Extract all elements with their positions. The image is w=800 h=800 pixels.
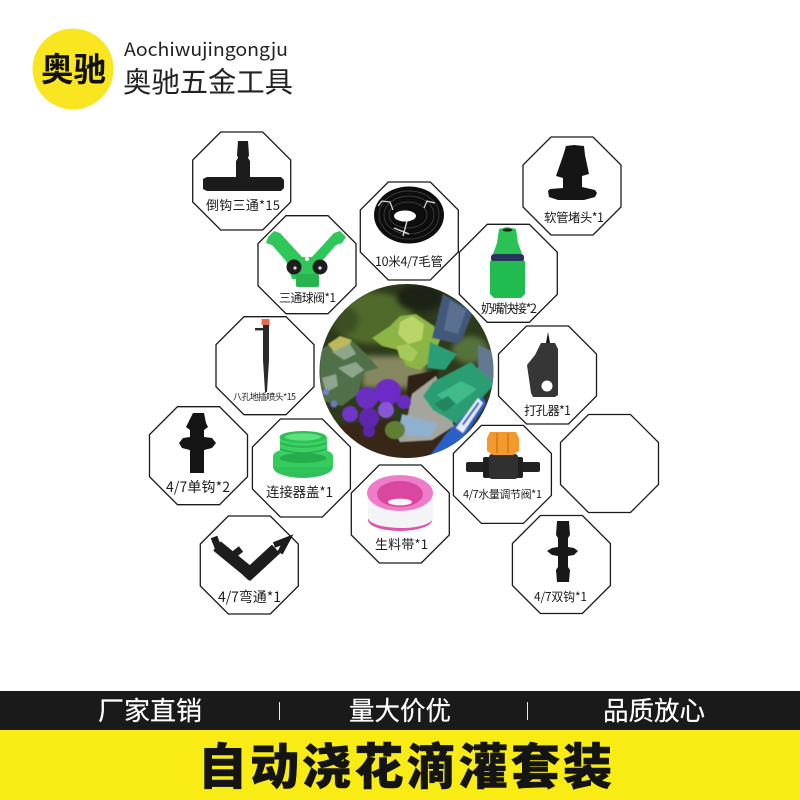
black selling-points bar (0, 691, 800, 730)
item: hole punch tool (498, 326, 596, 424)
item: connector cap (252, 419, 350, 517)
sleeve (432, 294, 473, 344)
item: tee barb connector (193, 132, 291, 230)
item: connector cap: 连接器盖*1 (266, 481, 333, 501)
empty octagon frame (560, 414, 658, 512)
yellow title bar: 自动浇花滴灌套装 (198, 728, 612, 799)
item: hole punch tool: 打孔器*1 (524, 400, 571, 419)
item: flow control valve: 4/7水量调节阀*1 (463, 486, 542, 502)
yellow title bar (0, 728, 800, 800)
black selling-points bar: 厂家直销 (98, 691, 202, 728)
blue tool (430, 396, 486, 458)
brand name (123, 36, 293, 101)
item: single barb connector: 4/7单钩*2 (166, 477, 230, 497)
item: PTFE tape roll: 生料带*1 (375, 534, 428, 553)
pot (394, 376, 454, 442)
item: hose end plug: 软管堵头*1 (544, 207, 604, 226)
item: Y ball valve (258, 216, 356, 314)
brand name: Aochiwujingongju (124, 36, 288, 62)
item: 10 m capillary tube coil (360, 182, 458, 280)
black selling-points bar: 量大价优 (349, 691, 451, 728)
soil (339, 418, 449, 458)
item: elbow connector (200, 516, 298, 614)
purple flowers (356, 387, 378, 409)
item: quick connector: 奶嘴快接*2 (481, 298, 537, 317)
brand name: 奥驰五金工具 (123, 60, 293, 101)
item: Y ball valve: 三通球阀*1 (279, 289, 336, 306)
lime plant (372, 314, 440, 370)
left foliage (320, 338, 378, 406)
item: ground spike sprinkler: 八孔地插喷头*15 (233, 390, 296, 403)
item: tee barb connector: 倒钩三通*15 (206, 195, 280, 214)
item: ground spike sprinkler (216, 317, 314, 415)
item: single barb connector (150, 407, 248, 505)
item: elbow connector: 4/7弯通*1 (218, 587, 281, 607)
item: hose end plug (523, 137, 621, 235)
logo: yellow circle badge: 奥驰 (41, 43, 106, 91)
black selling-points bar: 品质放心 (603, 691, 705, 728)
logo: yellow circle badge (32, 28, 114, 110)
item: double barb connector (512, 516, 610, 614)
item: double barb connector: 4/7双钩*1 (534, 588, 587, 605)
item: PTFE tape roll (351, 465, 449, 563)
gloves (427, 342, 457, 370)
item: quick connector (459, 224, 557, 322)
central garden photo (319, 284, 496, 463)
item: flow control valve (453, 425, 551, 523)
item: 10 m capillary tube coil: 10米4/7毛管 (375, 251, 443, 270)
